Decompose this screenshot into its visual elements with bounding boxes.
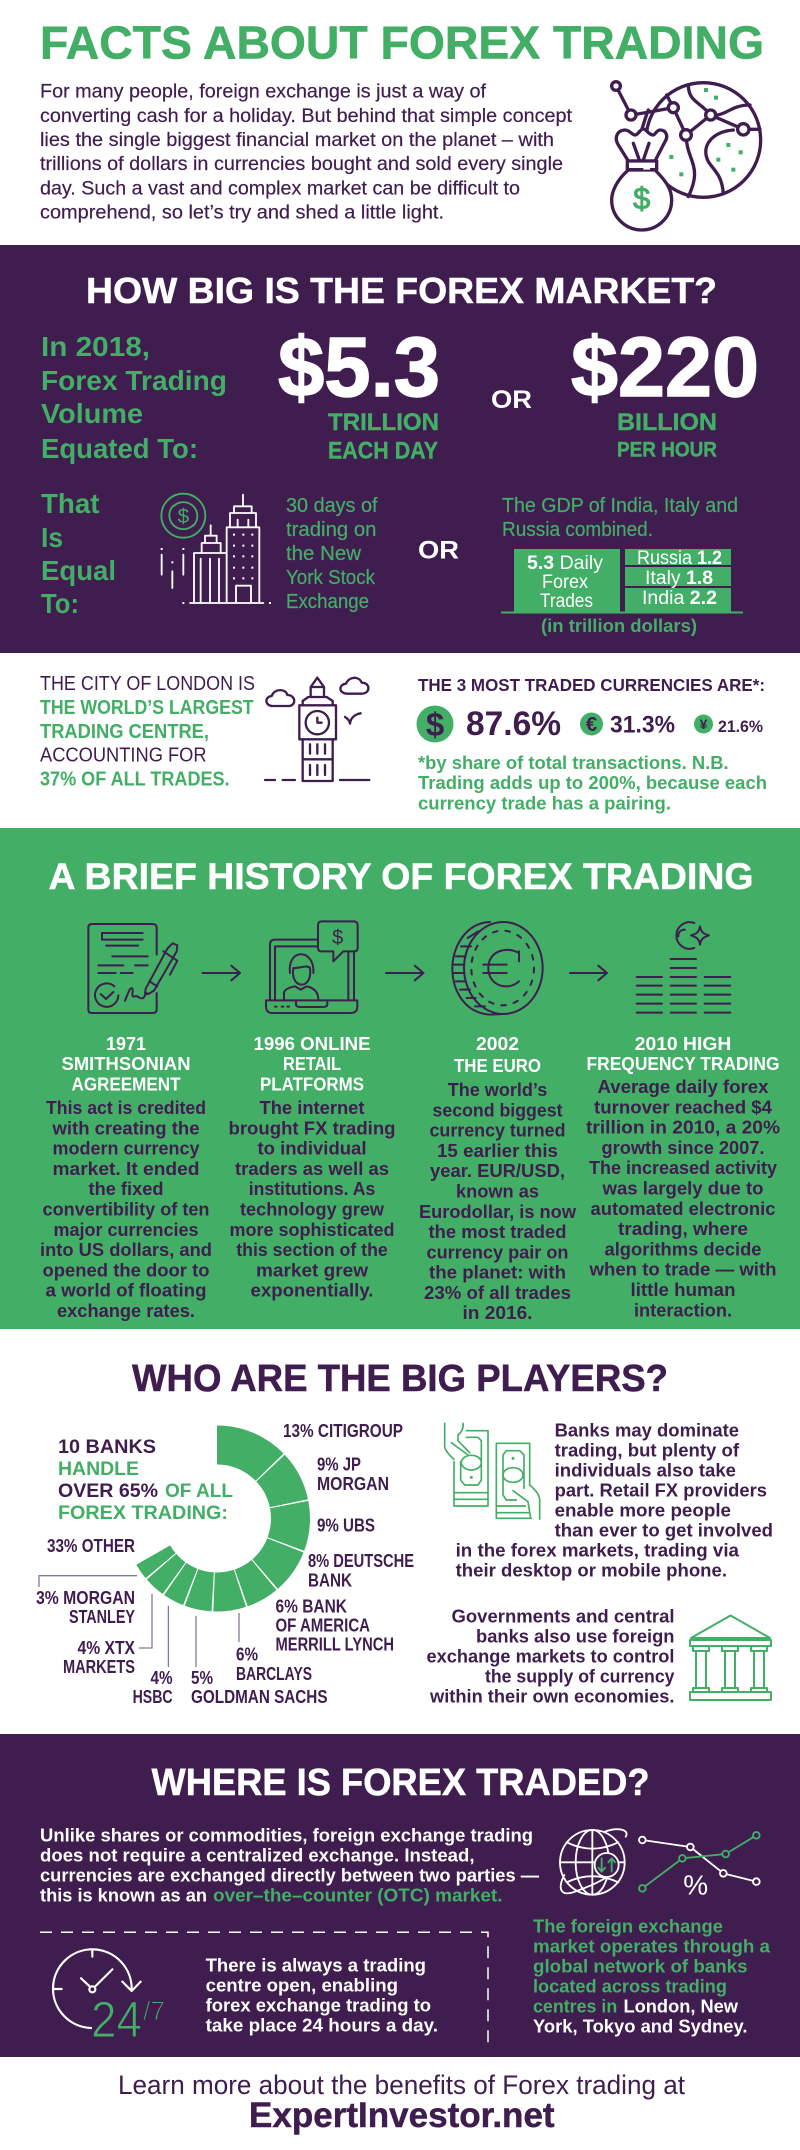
donut labels: STANLEY [69, 1607, 135, 1627]
always open text: take place 24 hours a day. [206, 2015, 438, 2036]
volume intro text: Volume [41, 398, 143, 429]
arrow [386, 966, 424, 980]
otc paragraph: Unlike shares or commodities, foreign exchange trading [40, 1825, 533, 1846]
donut labels: MORGAN [317, 1474, 389, 1494]
donut centre text: HANDLE [58, 1458, 139, 1480]
history column: 2002: currency turned [430, 1120, 566, 1141]
governments paragraph: Governments and central [452, 1606, 674, 1627]
history column: 1996: institutions. As [249, 1178, 375, 1199]
icon: skyscrapers with dollar coin [161, 494, 271, 604]
banks paragraph: in the forex markets, trading via [456, 1540, 740, 1561]
intro text: day. Such a vast and complex market can be difficult to [40, 178, 520, 200]
intro text: trillions of dollars in currencies bought and sold every single [40, 153, 563, 175]
stat: 5.3 trillion each day: TRILLION [328, 409, 439, 436]
history column: 1971: opened the door to [42, 1259, 210, 1280]
history column: 1996: traders as well as [235, 1158, 389, 1179]
donut labels: 4% [150, 1668, 172, 1688]
global network text: York, Tokyo and Sydney. [533, 2016, 748, 2037]
donut labels: MERRILL LYNCH [276, 1635, 394, 1655]
30 days text [286, 495, 378, 613]
heading: HOW BIG IS THE FOREX MARKET? [86, 270, 717, 311]
history column: 2010: was largely due to [601, 1178, 764, 1198]
donut labels: 4% XTX [78, 1638, 135, 1658]
history column: 1996: more sophisticated [230, 1219, 394, 1240]
that is equal to text: Is [41, 522, 63, 553]
history column: 2010 [586, 1033, 780, 1320]
stat: dollar share: $ [426, 706, 444, 743]
history column: 2002: year. EUR/USD, [430, 1160, 565, 1181]
history column: 1996: PLATFORMS [260, 1074, 364, 1094]
donut centre text: FOREX TRADING: [58, 1502, 228, 1524]
intro text [40, 80, 573, 224]
governments paragraph: the supply of currency [485, 1666, 675, 1687]
stat: 220 billion per hour [571, 320, 759, 462]
currencies heading: THE 3 MOST TRADED CURRENCIES ARE*: [418, 675, 765, 695]
stat: yen share [694, 714, 763, 736]
history column: 2002: 2002 [476, 1033, 519, 1054]
stat: 220 billion per hour: BILLION [617, 409, 717, 436]
history column: 2010: when to trade — with [588, 1259, 776, 1280]
icon: euro coin [452, 922, 543, 1015]
banks paragraph: enable more people [555, 1500, 731, 1521]
stat: 5.3 trillion each day [278, 320, 440, 465]
history column: 2010: growth since 2007. [602, 1137, 764, 1158]
history column: 2002: 15 earlier this [437, 1140, 558, 1161]
governments paragraph: exchange markets to control [426, 1646, 674, 1667]
chart: crossing percent lines: % [683, 1869, 708, 1900]
intro text: converting cash for a holiday. But behind that simple concept [40, 105, 573, 127]
governments paragraph [426, 1606, 675, 1707]
donut labels: BARCLAYS [236, 1664, 312, 1684]
icon: skyscrapers with dollar coin: $ [178, 505, 190, 528]
icon: signed contract [88, 924, 177, 1013]
governments paragraph: within their own economies. [429, 1686, 674, 1707]
30 days text: 30 days of [286, 495, 378, 517]
history column: 1996: brought FX trading [228, 1117, 396, 1138]
donut centre text: 10 BANKS [58, 1436, 156, 1458]
history column: 2002: 23% of all trades [424, 1282, 571, 1303]
stat: euro share [580, 712, 675, 739]
history column: 1996: market grew [256, 1259, 369, 1280]
history column: 2010: algorithms decide [604, 1238, 762, 1259]
chart: gdp comparison blocks: Italy 1.8 [645, 568, 713, 589]
icon: globe and money bag [612, 82, 761, 230]
history column: 1971: AGREEMENT [72, 1074, 181, 1094]
heading: A BRIEF HISTORY OF FOREX TRADING [48, 855, 754, 897]
stat: yen share: 21.6% [718, 717, 763, 736]
footnote: *by share of total transactions. N.B. [418, 752, 729, 773]
global network text: global network of banks [533, 1956, 748, 1977]
icon: coin stacks and crescent [637, 922, 730, 1013]
global network text: The foreign exchange [533, 1916, 723, 1937]
stat: 220 billion per hour: PER HOUR [617, 438, 717, 462]
or label: OR [418, 536, 459, 564]
chart: banks donut [144, 1445, 290, 1592]
history column: 1971: SMITHSONIAN [62, 1053, 190, 1074]
history column: 2002: the planet: with [429, 1262, 566, 1283]
footnote [418, 752, 767, 814]
donut labels: MARKETS [63, 1657, 135, 1677]
history column: 2010: interaction. [634, 1299, 732, 1320]
volume intro text [41, 331, 227, 464]
panel: introduction [0, 0, 800, 245]
history column: 2010: trading, where [618, 1218, 748, 1239]
history column: 2010: turnover reached $4 [594, 1096, 773, 1117]
history column: 2002: known as [456, 1180, 539, 1202]
volume intro text: In 2018, [41, 331, 150, 362]
banks paragraph: trading, but plenty of [555, 1440, 740, 1461]
history column: 2010: trillion in 2010, a 20% [586, 1117, 780, 1138]
chart: gdp comparison blocks: Trades [540, 591, 593, 612]
history column: 1971: major currencies [54, 1219, 198, 1240]
icon: online trader laptop: $ [332, 927, 343, 949]
history column: 1971: the fixed [88, 1178, 164, 1199]
london text: TRADING CENTRE, [40, 721, 209, 743]
history column: 2002 [419, 1033, 577, 1323]
icon: 24/7 clock [53, 1949, 141, 2028]
history column: 1971: market. It ended [52, 1158, 199, 1179]
global network text: centres in [533, 1996, 617, 2017]
that is equal to text: To: [41, 588, 79, 619]
stat: euro share: € [586, 714, 597, 736]
london text: ACCOUNTING FOR [40, 745, 207, 767]
that is equal to text [41, 488, 116, 619]
otc paragraph: over–the–counter (OTC) market. [213, 1885, 502, 1906]
intro text: For many people, foreign exchange is just a way of [40, 80, 487, 102]
chart caption: (in trillion dollars) [541, 616, 697, 636]
history column: 1996: to individual [258, 1138, 366, 1159]
24/7 label: /7 [143, 1996, 165, 2026]
history column: 1971: 1971 [106, 1033, 146, 1054]
panel: footer [0, 2057, 800, 2150]
history column: 2002: second biggest [432, 1099, 562, 1120]
london text: THE WORLD’S LARGEST [40, 697, 254, 719]
global network text: market operates through a [533, 1936, 771, 1957]
donut labels: GOLDMAN SACHS [191, 1687, 328, 1707]
30 days text: Exchange [286, 591, 369, 613]
stat: 220 billion per hour: $220 [571, 320, 759, 414]
30 days text: the New [286, 543, 362, 565]
global network text [533, 1916, 771, 2037]
chart: gdp comparison blocks: Russia 1.2 [637, 548, 722, 569]
arrow [202, 966, 240, 980]
donut labels: OF AMERICA [276, 1616, 370, 1636]
footnote: currency trade has a pairing. [418, 793, 671, 814]
panel: where is forex traded [0, 1734, 800, 2057]
history column: 1996: 1996 ONLINE [254, 1033, 370, 1054]
footer call to action: Learn more about the benefits of Forex trading at [118, 2070, 685, 2100]
icon: globe with exchange arrows [560, 1829, 627, 1895]
banks paragraph: than ever to get involved [555, 1520, 773, 1541]
heading: WHO ARE THE BIG PLAYERS? [132, 1358, 668, 1400]
history column: 2002: Eurodollar, is now [419, 1201, 577, 1222]
history column: 2002: in 2016. [462, 1302, 532, 1323]
global network text: located across trading [533, 1976, 727, 1997]
footnote: Trading adds up to 200%, because each [418, 772, 767, 793]
banks paragraph: Banks may dominate [555, 1420, 739, 1441]
history column: 2002: The world’s [448, 1079, 547, 1100]
stat: 5.3 trillion each day: EACH DAY [328, 438, 438, 465]
chart: gdp comparison blocks: India 2.2 [642, 588, 717, 609]
history column: 1971: into US dollars, and [40, 1239, 212, 1260]
history column: 1996: exponentially. [250, 1280, 374, 1301]
that is equal to text: Equal [41, 555, 116, 586]
history column: 2010: automated electronic [590, 1198, 776, 1219]
footer website: ExpertInvestor.net [249, 2096, 555, 2135]
london text [40, 673, 255, 791]
icon: online trader laptop [266, 921, 358, 1013]
stat: 5.3 trillion each day: $5.3 [278, 320, 440, 414]
volume intro text: Equated To: [41, 433, 198, 464]
leader lines [39, 1576, 239, 1667]
donut labels: 8% DEUTSCHE [308, 1551, 414, 1571]
banks paragraph: their desktop or mobile phone. [456, 1560, 727, 1581]
stat: euro share: 31.3% [610, 712, 675, 739]
donut labels: 9% UBS [317, 1516, 375, 1536]
always open text [206, 1955, 438, 2036]
otc paragraph [40, 1825, 539, 1906]
that is equal to text: That [41, 488, 100, 519]
arrow [570, 966, 607, 980]
stat: dollar share [416, 705, 561, 743]
london text: 37% OF ALL TRADES. [40, 769, 230, 791]
history column: 1971: convertibility of ten [42, 1198, 210, 1220]
donut labels: 33% OTHER [47, 1536, 135, 1556]
icons and arrows row [88, 921, 730, 1015]
24/7 label: 24 [91, 1991, 142, 2048]
history column: 1996: RETAIL [283, 1053, 341, 1074]
stat: yen share: ¥ [700, 716, 708, 732]
otc paragraph: does not require a centralized exchange. Instead, [40, 1845, 474, 1866]
history column: 1996: The internet [260, 1097, 364, 1118]
gdp text [502, 495, 738, 541]
history column: 1996 [228, 1033, 396, 1301]
banks paragraph: part. Retail FX providers [555, 1480, 767, 1501]
history column: 1996: this section of the [236, 1239, 388, 1260]
panel: brief history [0, 828, 800, 1329]
or label: OR [491, 386, 532, 414]
chart: crossing percent lines [639, 1832, 760, 1900]
donut labels: 5% [191, 1668, 213, 1688]
panel: london and currencies [0, 653, 800, 828]
always open text: centre open, enabling [206, 1975, 398, 1996]
history column: 1996: technology grew [240, 1198, 385, 1220]
global network text: London, New [624, 1996, 739, 2017]
donut centre text [58, 1436, 233, 1524]
history column: 1971: a world of floating [46, 1280, 206, 1301]
donut labels [36, 1421, 414, 1707]
banks paragraph [456, 1420, 773, 1581]
gdp text: Russia combined. [502, 519, 653, 541]
volume intro text: Forex Trading [41, 365, 227, 396]
history column: 2010: little human [630, 1279, 736, 1300]
otc paragraph: currencies are exchanged directly between two parties — [40, 1865, 539, 1886]
history column: 1971 [40, 1033, 212, 1321]
intro text: lies the single biggest financial market on the planet – with [40, 129, 554, 151]
otc paragraph: this is known as an [40, 1885, 207, 1906]
donut labels: 9% JP [317, 1455, 361, 1475]
history column: 2002: THE EURO [454, 1055, 541, 1076]
always open text: forex exchange trading to [206, 1995, 431, 2016]
london text: THE CITY OF LONDON IS [40, 673, 255, 695]
donut labels: HSBC [133, 1687, 173, 1707]
panel: big players [0, 1329, 800, 1734]
banks paragraph: individuals also take [555, 1460, 736, 1481]
icon: hands exchanging banknotes [445, 1423, 540, 1519]
history column: 1971: exchange rates. [57, 1300, 195, 1321]
30 days text: trading on [286, 519, 376, 541]
history column: 2002: the most traded [428, 1221, 566, 1242]
history column: 1971: This act is credited [46, 1097, 206, 1118]
history column: 2010: FREQUENCY TRADING [586, 1053, 780, 1074]
chart: gdp comparison blocks [501, 548, 743, 614]
title: FACTS ABOUT FOREX TRADING [40, 16, 764, 68]
history column: 2010: The increased activity [589, 1157, 778, 1178]
panel: how big is the forex market [0, 245, 800, 653]
history column: 2010: 2010 HIGH [635, 1033, 731, 1054]
heading: WHERE IS FOREX TRADED? [152, 1762, 650, 1804]
chart: gdp comparison blocks: Forex [542, 572, 588, 593]
history column: 1971: with creating the [52, 1117, 200, 1138]
donut labels: 13% CITIGROUP [283, 1421, 403, 1441]
history column: 1971: modern currency [52, 1138, 200, 1159]
donut labels: 6% BANK [276, 1597, 347, 1617]
history column: 2002: currency pair on [426, 1241, 568, 1262]
donut labels: BANK [308, 1571, 352, 1591]
donut centre text: OVER 65% [58, 1480, 158, 1502]
governments paragraph: banks also use foreign [476, 1626, 674, 1647]
chart: gdp comparison blocks: 5.3 Daily [527, 553, 604, 574]
always open text: There is always a trading [206, 1955, 426, 1976]
donut labels: 6% [236, 1645, 258, 1665]
30 days text: York Stock [286, 567, 376, 589]
donut centre text: OF ALL [165, 1480, 233, 1502]
icon: globe and money bag: $ [633, 182, 650, 216]
intro text: comprehend, so let’s try and shed a little light. [40, 202, 444, 224]
donut labels: 3% MORGAN [36, 1588, 135, 1608]
icon: bank building [690, 1616, 771, 1700]
stat: dollar share: 87.6% [466, 705, 561, 743]
gdp text: The GDP of India, Italy and [502, 495, 738, 517]
dashed divider [40, 1932, 488, 2043]
icon: big ben [265, 678, 369, 781]
history column: 2010: Average daily forex [598, 1076, 769, 1097]
